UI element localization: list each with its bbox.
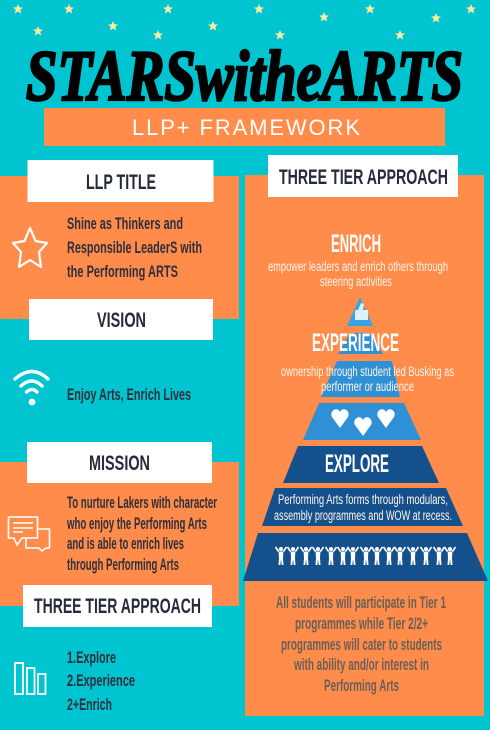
panel: three tier approach pyramid xyxy=(243,155,488,716)
heading: mission xyxy=(27,442,212,483)
heading: three tier approach xyxy=(268,155,458,197)
tier: enrich: steering activities xyxy=(320,274,392,289)
panel: vision xyxy=(15,299,213,404)
mission text: through Performing Arts xyxy=(67,555,179,574)
heading: vision xyxy=(29,299,213,340)
tier: experience xyxy=(281,329,454,394)
heading: LLP title: LLP TITLE xyxy=(86,171,156,194)
heading: LLP title xyxy=(28,160,214,202)
panel: LLP title xyxy=(0,160,239,319)
tier: explore: EXPLORE xyxy=(325,450,389,478)
icon: thumbs up xyxy=(355,303,368,320)
mission text: and is able to enrich lives xyxy=(67,534,184,553)
tier: experience: EXPERIENCE xyxy=(312,329,399,357)
pyramid chart xyxy=(243,297,488,581)
panel: mission xyxy=(0,442,239,606)
LLP title text: Shine as Thinkers and xyxy=(67,214,183,233)
mission text: who enjoy the Performing Arts xyxy=(66,514,207,533)
participation note: Performing Arts xyxy=(324,676,399,695)
mission text: To nurture Lakers with character xyxy=(67,493,217,512)
tier: enrich: ENRICH xyxy=(331,230,381,258)
vision text: Enjoy Arts, Enrich Lives xyxy=(67,385,191,404)
participation note xyxy=(276,593,446,695)
icon: wifi signal xyxy=(15,372,48,404)
three tier list text xyxy=(67,648,135,714)
subtitle banner xyxy=(44,108,445,146)
heading: three tier approach: THREE TIER APPROACH xyxy=(34,595,201,618)
three tier list text: 2.Experience xyxy=(67,671,135,690)
LLP title text xyxy=(67,214,202,281)
three tier list text: 1.Explore xyxy=(67,648,116,667)
icon: speech bubbles xyxy=(8,517,50,551)
heading: mission: MISSION xyxy=(89,452,150,475)
LLP title text: the Performing ARTS xyxy=(67,262,178,281)
subtitle banner: LLP+ FRAMEWORK xyxy=(132,115,360,140)
decorative stars xyxy=(13,4,476,40)
LLP title text: Responsible LeaderS with xyxy=(67,238,202,257)
three tier list text: 2+Enrich xyxy=(67,695,112,714)
icon: bar chart xyxy=(15,663,46,694)
tier: experience: performer or audience xyxy=(321,379,414,394)
tier: enrich xyxy=(268,230,448,289)
icon: star xyxy=(13,228,47,267)
heading: three tier approach xyxy=(23,585,212,627)
icon: row of people xyxy=(276,547,456,565)
tier: explore xyxy=(274,450,452,523)
mission text xyxy=(66,493,217,574)
panel: three tier list xyxy=(15,585,212,714)
heading: vision: VISION xyxy=(97,309,146,332)
icon: hearts xyxy=(331,409,395,436)
